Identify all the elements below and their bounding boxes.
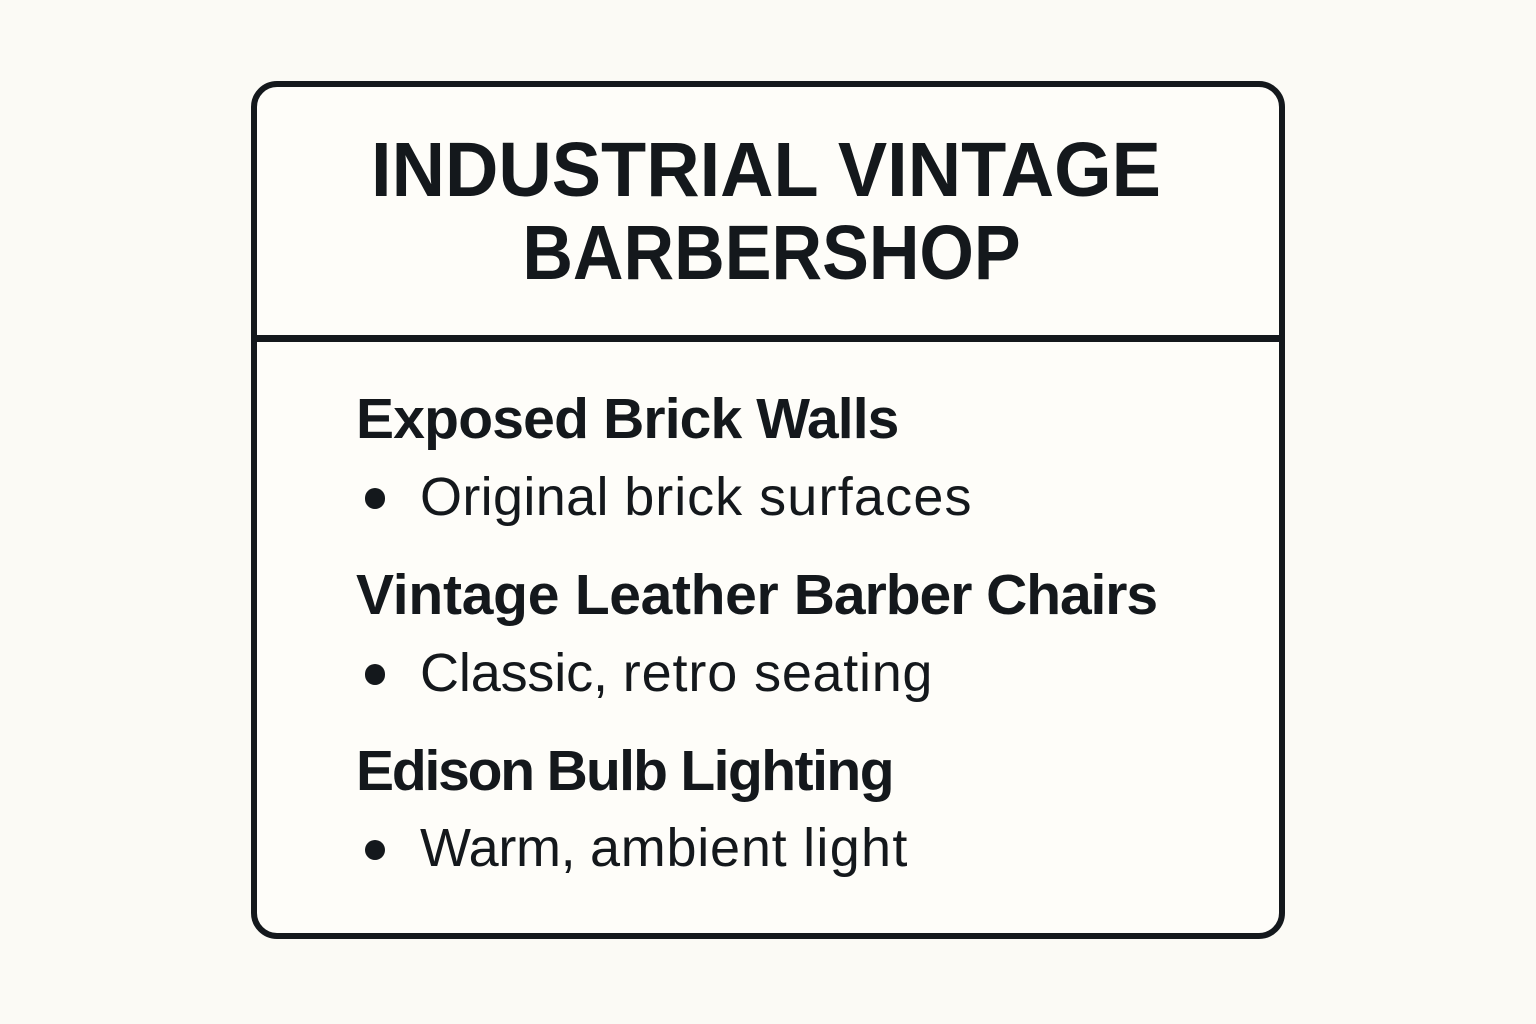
text: warm, ambient light: Warm, ambient light [420, 818, 909, 878]
title: INDUSTRIAL VINTAGE [371, 127, 1161, 213]
heading: vintage leather barber chairs: Vintage Leather Barber Chairs [356, 563, 1157, 627]
text: classic, retro seating: Classic, retro seating [420, 643, 933, 703]
title: BARBERSHOP [522, 210, 1021, 296]
bullet icon 2 [365, 664, 385, 684]
bullet icon 1 [365, 488, 385, 508]
text: original brick surfaces: Original brick surfaces [420, 467, 973, 527]
bullet icon 3 [365, 840, 385, 860]
heading: edison bulb lighting: Edison Bulb Lighting [356, 739, 893, 803]
panel: card [251, 81, 1285, 939]
heading: exposed brick walls: Exposed Brick Walls [356, 387, 898, 451]
title [371, 127, 1161, 296]
